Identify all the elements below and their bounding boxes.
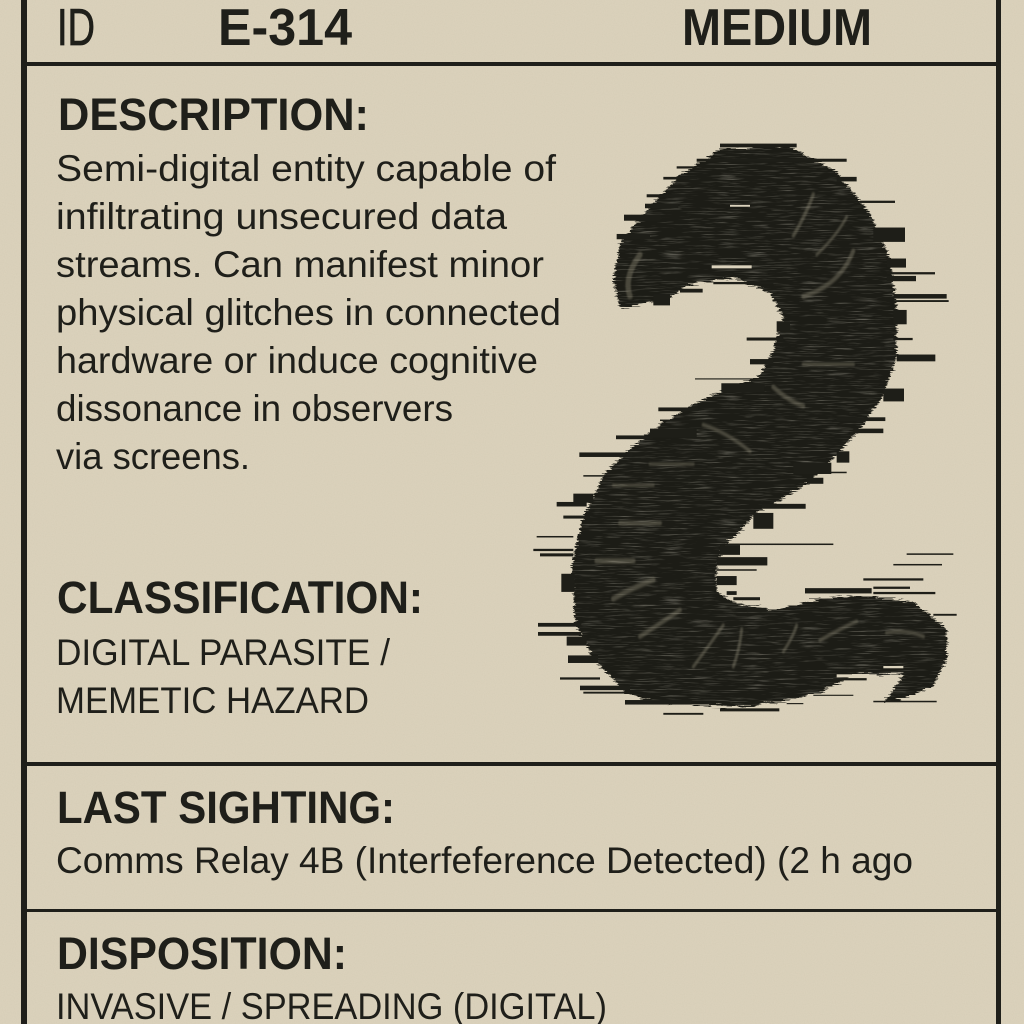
description text (56, 148, 561, 477)
last sighting text: Comms Relay 4B (Interfeference Detected) (2 h ago (56, 840, 913, 881)
worm segment highlights (597, 194, 923, 667)
heading: classification: CLASSIFICATION: (57, 572, 423, 623)
glitch gaps in body (712, 205, 903, 677)
classification text (56, 632, 391, 721)
header row: id and threat level: ID (57, 0, 95, 57)
description text: physical glitches in connected (56, 292, 561, 333)
description text: streams. Can manifest minor (56, 244, 544, 285)
panel: classification (56, 572, 423, 721)
description text: hardware or induce cognitive (56, 340, 538, 381)
description text: Semi-digital entity capable of (56, 148, 557, 189)
panel: disposition (56, 928, 607, 1024)
classification text: DIGITAL PARASITE / (56, 632, 391, 673)
heading: description: DESCRIPTION: (58, 89, 369, 140)
description text: infiltrating unsecured data (56, 196, 507, 237)
worm hide texture (572, 145, 947, 706)
glitch bars (533, 144, 957, 715)
panel: description (56, 89, 561, 477)
heading: last sighting: LAST SIGHTING: (57, 782, 395, 833)
panel: last sighting (56, 782, 913, 881)
description text: dissonance in observers (56, 388, 453, 429)
header row: id and threat level: E-314 (218, 0, 352, 57)
worm body (572, 145, 947, 706)
header row: id and threat level (57, 0, 872, 57)
description text: via screens. (56, 436, 250, 477)
illustration: glitching worm (533, 144, 957, 715)
heading: disposition: DISPOSITION: (57, 928, 347, 979)
classification text: MEMETIC HAZARD (56, 680, 369, 721)
header row: id and threat level: MEDIUM (682, 0, 872, 57)
